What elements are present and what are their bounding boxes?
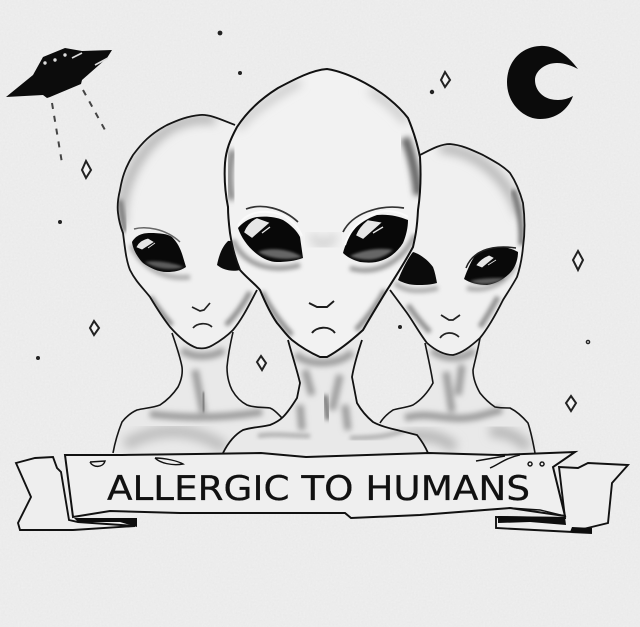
alien: center: [223, 69, 428, 453]
left alien neck and shoulders: [113, 330, 282, 453]
alien: left: [113, 115, 282, 453]
banner title: ALLERGIC TO HUMANS: [107, 469, 530, 509]
left alien eyes: [132, 233, 186, 272]
center alien head: [225, 69, 421, 357]
left alien head: [118, 115, 262, 348]
right alien head: [385, 144, 524, 355]
icon: ufo: [6, 48, 112, 163]
banner details: [90, 455, 565, 516]
icon: crescent moon: [507, 46, 578, 119]
right ribbon tail: [496, 463, 628, 533]
illustration: allergic to humans: [6, 30, 630, 534]
center alien face: [309, 301, 335, 333]
banner folds: [74, 516, 592, 533]
right alien neck and shoulders: [378, 338, 535, 453]
left ribbon tail: [16, 457, 135, 530]
center alien right eye: [343, 215, 408, 263]
banner: [16, 452, 628, 533]
alien: right: [378, 144, 535, 453]
center alien left eye: [238, 217, 303, 262]
left alien face: [192, 303, 212, 328]
banner body: [65, 452, 575, 518]
right alien face: [440, 315, 460, 338]
right alien eyes: [398, 252, 437, 285]
stars and dots: [36, 31, 590, 411]
ufo beams: [52, 90, 105, 163]
center alien neck and shoulders: [223, 340, 428, 453]
